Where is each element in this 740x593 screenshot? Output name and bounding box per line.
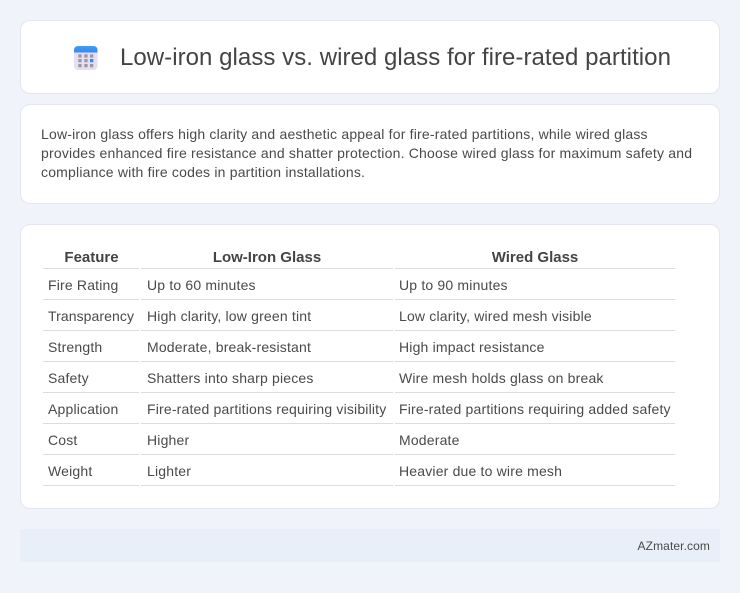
row: Cost: Cost <box>48 432 78 448</box>
table header: Feature <box>64 249 119 266</box>
summary text: provides enhanced fire resistance and shatter protection. Choose wired glass for maximum safety and <box>41 145 692 161</box>
row: Weight: Weight <box>48 463 92 479</box>
row: Strength: Strength <box>48 339 102 355</box>
row: Strength: Moderate, break-resistant <box>147 339 311 355</box>
row: Cost: Moderate <box>399 432 460 448</box>
table card <box>20 224 720 509</box>
row: Application: Fire-rated partitions requiring added safety <box>399 401 671 417</box>
row: Safety <box>48 370 604 386</box>
row: Fire Rating <box>48 277 508 293</box>
row: Weight: Heavier due to wire mesh <box>399 463 562 479</box>
row: Transparency <box>48 308 592 324</box>
row: Application <box>48 401 671 417</box>
row: Fire Rating: Fire Rating <box>48 277 118 293</box>
footer text: AZmater.com <box>638 539 710 553</box>
row: Strength <box>48 339 545 355</box>
row: Application: Fire-rated partitions requiring visibility <box>147 401 386 417</box>
row: Application: Application <box>48 401 118 417</box>
table header <box>64 249 578 266</box>
footer bar <box>20 529 720 562</box>
table header: Low-Iron Glass <box>213 249 321 266</box>
row: Transparency: Low clarity, wired mesh visible <box>399 308 592 324</box>
row: Safety: Wire mesh holds glass on break <box>399 370 604 386</box>
row: Fire Rating: Up to 60 minutes <box>147 277 256 293</box>
icon: calendar <box>74 46 98 70</box>
row: Safety: Safety <box>48 370 89 386</box>
title: Low-iron glass vs. wired glass for fire-rated partition <box>120 44 671 71</box>
summary text <box>41 126 692 180</box>
row: Fire Rating: Up to 90 minutes <box>399 277 508 293</box>
summary text: Low-iron glass offers high clarity and aesthetic appeal for fire-rated partitions, while wired glass <box>41 126 648 142</box>
row: Cost: Higher <box>147 432 189 448</box>
summary text: compliance with fire codes in partition installations. <box>41 164 365 180</box>
row: Weight: Lighter <box>147 463 191 479</box>
row: Weight <box>48 463 562 479</box>
row: Cost <box>48 432 460 448</box>
row: Strength: High impact resistance <box>399 339 545 355</box>
table header: Wired Glass <box>492 249 578 266</box>
row: Safety: Shatters into sharp pieces <box>147 370 314 386</box>
row: Transparency: High clarity, low green tint <box>147 308 311 324</box>
title card <box>20 20 720 94</box>
row: Transparency: Transparency <box>48 308 134 324</box>
summary card <box>20 104 720 204</box>
